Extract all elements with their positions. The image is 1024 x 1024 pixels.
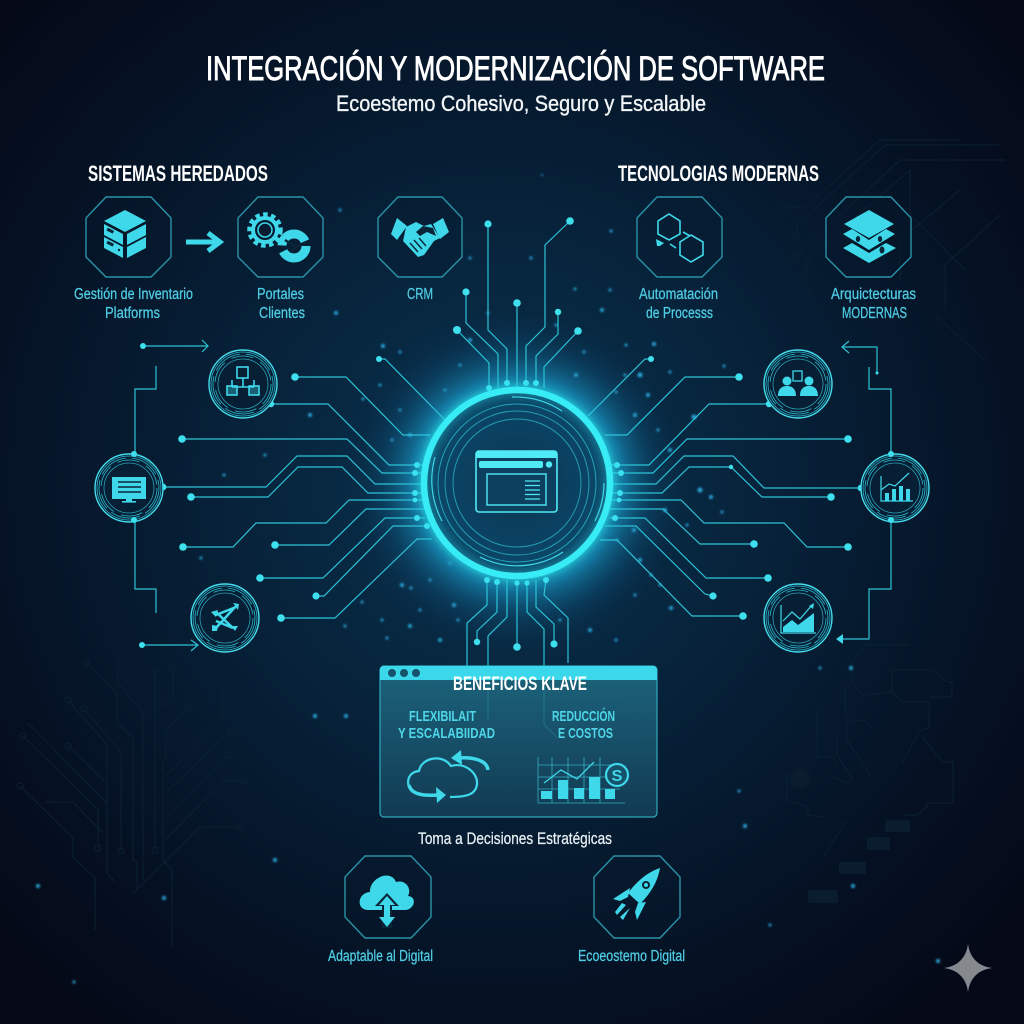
- circuit traces: bottom: [467, 577, 568, 737]
- card: adaptable: [328, 856, 433, 965]
- label: portales clientes: Clientes: [259, 305, 305, 322]
- icon: cloud with up down arrow: [360, 875, 414, 928]
- center glow: [347, 313, 687, 653]
- icon: rising bars: [881, 473, 913, 501]
- node: bar chart: [861, 451, 929, 523]
- label: gestion de inventario: Gestión de Inventario: [74, 286, 193, 303]
- icon: people: [778, 371, 818, 396]
- panel: beneficios clave: [380, 666, 657, 817]
- icon: server stack: [104, 210, 146, 258]
- icon: network arrows: [211, 603, 239, 631]
- icon: application window: [476, 451, 557, 512]
- card: arquitecturas: [826, 197, 916, 322]
- card: crm: [378, 197, 462, 303]
- faint background circuit top right: [780, 140, 1005, 360]
- icon: handshake: [391, 218, 449, 257]
- icon: sparkle watermark: [944, 944, 992, 992]
- card: ecosistema: [578, 856, 685, 965]
- label: arquitecturas: Arquictecturas: [831, 286, 916, 303]
- label: crm: CRM: [407, 286, 433, 303]
- faint background circuit bottom right: [787, 645, 953, 903]
- benefit: flexibilidad: FLEXIBILAIT: [409, 708, 476, 725]
- label: automatacion: de Processs: [646, 305, 713, 322]
- subtitle: Ecoestemo Cohesivo, Seguro y Escalable: [336, 91, 706, 116]
- connectors: right: [836, 341, 891, 644]
- arrow: legacy flow: [186, 233, 220, 251]
- central hub ring: [424, 390, 610, 576]
- node: org chart: [209, 350, 277, 418]
- icon: area chart: [781, 603, 816, 633]
- label: portales clientes: Portales: [257, 286, 304, 303]
- label: gestion de inventario: [74, 286, 193, 322]
- icon: monitor: [112, 477, 146, 503]
- connectors: left: [135, 340, 208, 651]
- window dots: [388, 669, 420, 677]
- benefit: flexibilidad: [398, 708, 495, 742]
- icon: cost chart: S: [612, 768, 623, 785]
- icon: org chart: [227, 367, 259, 395]
- icon: layers: [843, 210, 896, 263]
- panel title bar: [380, 666, 657, 680]
- benefit: reduccion: E COSTOS: [558, 725, 613, 742]
- benefit: reduccion: REDUCCIÓN: [552, 707, 615, 725]
- icon: gear and refresh: [250, 214, 306, 258]
- label: portales clientes: [257, 286, 305, 322]
- circuit traces: top: [376, 217, 654, 420]
- node: network arrows: [191, 584, 259, 652]
- node: monitor: [95, 451, 163, 523]
- icon: cloud with arrows: [408, 750, 488, 803]
- panel heading: BENEFICIOS KLAVE: [453, 674, 587, 695]
- faint background circuit bottom left: [17, 660, 248, 947]
- card: gestion de inventario: [74, 197, 193, 322]
- label: arquitecturas: [831, 286, 916, 322]
- card: automatacion: [637, 197, 722, 322]
- heading: sistemas heredados: SISTEMAS HEREDADOS: [88, 161, 268, 186]
- node: area chart: [764, 584, 832, 652]
- label: automatacion: Automatación: [639, 286, 718, 303]
- heading: tecnologias modernas: TECNOLOGIAS MODERNAS: [618, 161, 819, 186]
- caption: toma de decisiones: Toma a Decisiones Estratégicas: [418, 829, 612, 848]
- benefit: flexibilidad: Y ESCALABIIDAD: [398, 725, 495, 742]
- icon: rocket: [613, 868, 660, 920]
- circuit traces: left: [160, 373, 432, 622]
- node: people: [764, 350, 832, 418]
- particles: [36, 174, 940, 984]
- icon: cost chart: [538, 757, 628, 803]
- circuit traces: right: [600, 373, 864, 620]
- icon: hexagons: [656, 214, 703, 262]
- label: adaptable: Adaptable al Digital: [328, 948, 433, 965]
- card: portales clientes: [238, 197, 323, 322]
- benefit: reduccion: [552, 707, 615, 742]
- label: gestion de inventario: Platforms: [105, 305, 160, 322]
- label: arquitecturas: MODERNAS: [842, 305, 907, 322]
- label: automatacion: [639, 286, 718, 322]
- title: INTEGRACIÓN Y MODERNIZACIÓN DE SOFTWARE: [206, 50, 825, 88]
- label: ecosistema: Ecoeostemo Digital: [578, 948, 685, 965]
